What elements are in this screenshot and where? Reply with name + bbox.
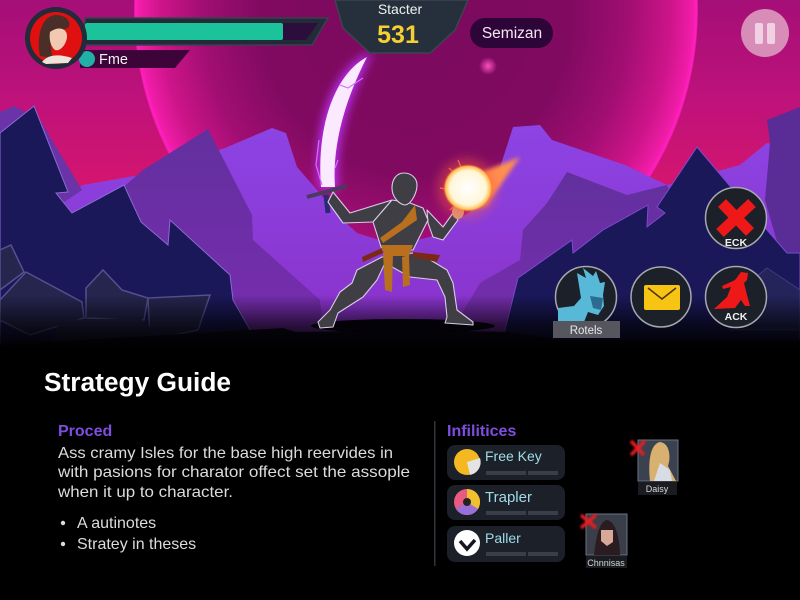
button: ECK: ECK: [725, 237, 748, 249]
button: mail: [631, 267, 691, 327]
red cross mark: [581, 515, 596, 528]
body copy: when it up to character.: [57, 484, 233, 501]
item: Free Key: [447, 445, 565, 480]
HUD: name pill: Semizan: [482, 25, 542, 42]
button: rebels: Rotels: [570, 325, 603, 337]
background: light purple mountain band: [0, 125, 800, 350]
name badge icon: [79, 51, 95, 67]
left text block: [57, 423, 410, 553]
body copy: with pasions for charator offect set the assople: [57, 464, 410, 481]
item: Free Key: Free Key: [485, 448, 542, 464]
background: sky sparkle: [479, 57, 497, 75]
background: purple peak far left: [0, 106, 82, 205]
ninja torso: [373, 200, 428, 250]
HUD: name plate: [79, 50, 190, 68]
body copy: Ass cramy Isles for the base high reervides in: [58, 445, 393, 462]
icon: red cross: [720, 203, 752, 233]
portrait: second character: [581, 514, 627, 568]
ninja head: [392, 173, 417, 205]
fireball: [437, 157, 520, 218]
health fill: [85, 23, 283, 40]
background: mid purple mountain left: [100, 129, 325, 350]
divider: [434, 421, 436, 566]
body copy: [57, 445, 410, 501]
HUD: name pill: [470, 18, 553, 48]
button: ECK: [706, 188, 766, 249]
ninja shadow: [311, 319, 495, 333]
background: rocks left: [0, 245, 210, 348]
bullet list: [61, 515, 196, 553]
ninja left arm: [328, 192, 392, 223]
portrait: Daisy: [631, 440, 678, 495]
background: rocks right: [730, 268, 800, 330]
subheading: Proced: [58, 423, 112, 440]
background: magenta sky: [0, 0, 800, 360]
black panel: [0, 350, 800, 600]
bullet list: Stratey in theses: [77, 536, 196, 553]
HUD: pause button: [741, 9, 789, 57]
item: Trapler: [447, 485, 565, 520]
HUD: score badge: [335, 0, 468, 53]
background: navy mountain right: [500, 147, 800, 350]
right heading: Infilitices: [447, 423, 516, 440]
background: mid purple mountain right: [440, 172, 720, 350]
score label: Stacter: [378, 1, 423, 17]
item: Paller: Paller: [485, 530, 521, 546]
bullet list: A autinotes: [77, 515, 156, 532]
item: Trapler: Trapler: [485, 489, 532, 506]
background: glowing portal ring: [134, 0, 698, 310]
background: navy mountain left: [0, 106, 252, 350]
HUD: health bar: [85, 18, 328, 45]
button: rebels: [553, 266, 620, 338]
portrait: Daisy: Daisy: [646, 484, 669, 494]
ninja hand: [452, 205, 464, 219]
button: ACK: [706, 266, 766, 328]
red cross mark: [631, 441, 645, 455]
ninja right arm: [427, 210, 458, 240]
item: Paller: [447, 526, 565, 562]
icon: envelope: [644, 285, 680, 310]
score value: 531: [377, 21, 419, 49]
player name: Fme: [99, 52, 128, 68]
icon: red figure: [714, 272, 750, 309]
ground ridge: [0, 328, 800, 352]
HUD: player avatar: [25, 7, 87, 69]
heading: Strategy Guide: [44, 367, 231, 397]
background: dark purple mountain far right: [765, 107, 800, 260]
ninja sash: [362, 205, 440, 292]
bottom fade to black: [0, 295, 800, 350]
icon: blue character: [558, 268, 605, 322]
ninja legs: [318, 253, 473, 328]
sword: [307, 57, 367, 213]
button: ACK: ACK: [725, 311, 748, 323]
rebels label: [553, 321, 620, 338]
ninja figure: [318, 173, 473, 328]
portrait: second character: Chnnisas: [587, 558, 625, 568]
